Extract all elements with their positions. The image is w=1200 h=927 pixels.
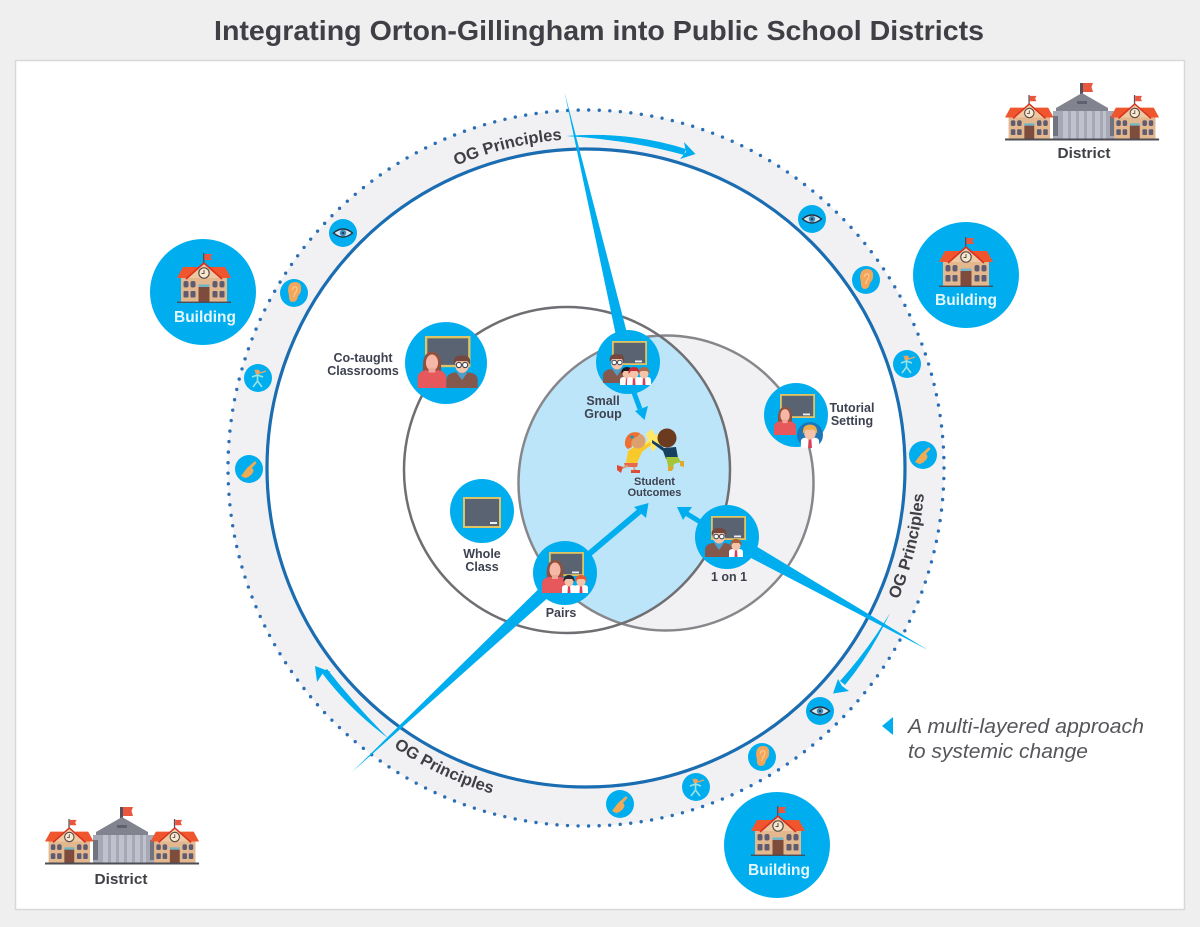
title: Integrating Orton-Gillingham into Public School Districts [214,15,984,46]
building badge: left: Building [174,309,236,326]
setting: co-taught classrooms: Co-taught [333,351,393,365]
student outcomes: high-five children [617,428,684,473]
building badge: bottom: Building [748,862,810,879]
district icon: top right: District [1058,146,1111,162]
curved arrow: right ring [833,613,890,694]
district ring: OG principles band [228,110,944,826]
setting: tutorial [764,383,874,448]
icons: principles, bottom arc [606,697,834,818]
building badge: bottom [724,792,830,898]
setting: pairs: Pairs [546,606,576,620]
callout: multi-layered approach: A multi-layered approach [907,716,1144,738]
callout: multi-layered approach: to systemic change [908,741,1088,763]
district icon: top right [1005,83,1159,162]
ring label: OG Principles right: OG Principles [890,494,924,598]
setting: pairs [533,541,597,620]
arrow: top wedge to small group [564,92,648,420]
setting: small group [584,330,660,421]
setting: whole class: Class [465,560,499,574]
setting: whole class: Whole [463,547,501,561]
label: student outcomes: Student [634,476,675,488]
setting: small group: Group [584,407,622,421]
building badge: upper right: Building [935,292,997,309]
setting: tutorial: Setting [831,414,873,428]
setting: 1 on 1: 1 on 1 [711,570,747,584]
setting: co-taught classrooms: Classrooms [327,364,399,378]
icons: principles, right arc [798,205,937,469]
curved arrow: left ring [315,666,388,738]
setting: 1 on 1 [695,505,759,584]
arrow: right wedge to 1 on 1 [677,507,928,650]
ring label: OG Principles top: OG Principles [454,130,562,164]
label: student outcomes: Outcomes [628,487,681,499]
setting: tutorial: Tutorial [830,401,874,415]
setting: small group: Small [586,394,620,408]
callout: multi-layered approach [882,716,1144,763]
venn diagram: classroom settings [404,307,814,633]
setting: whole class [450,479,514,574]
district icon: bottom left: District [94,872,148,888]
building badge: upper right [913,222,1019,328]
arrow: lower-left wedge to pairs [352,503,648,772]
ring label: OG Principles bottom: OG Principles [396,740,493,793]
label: student outcomes [628,476,681,499]
icons: principles, left arc [235,219,357,483]
building badge: left [150,239,256,345]
district icon: bottom left [45,807,199,888]
setting: co-taught classrooms [327,322,487,404]
curved arrow: top ring [566,135,696,159]
